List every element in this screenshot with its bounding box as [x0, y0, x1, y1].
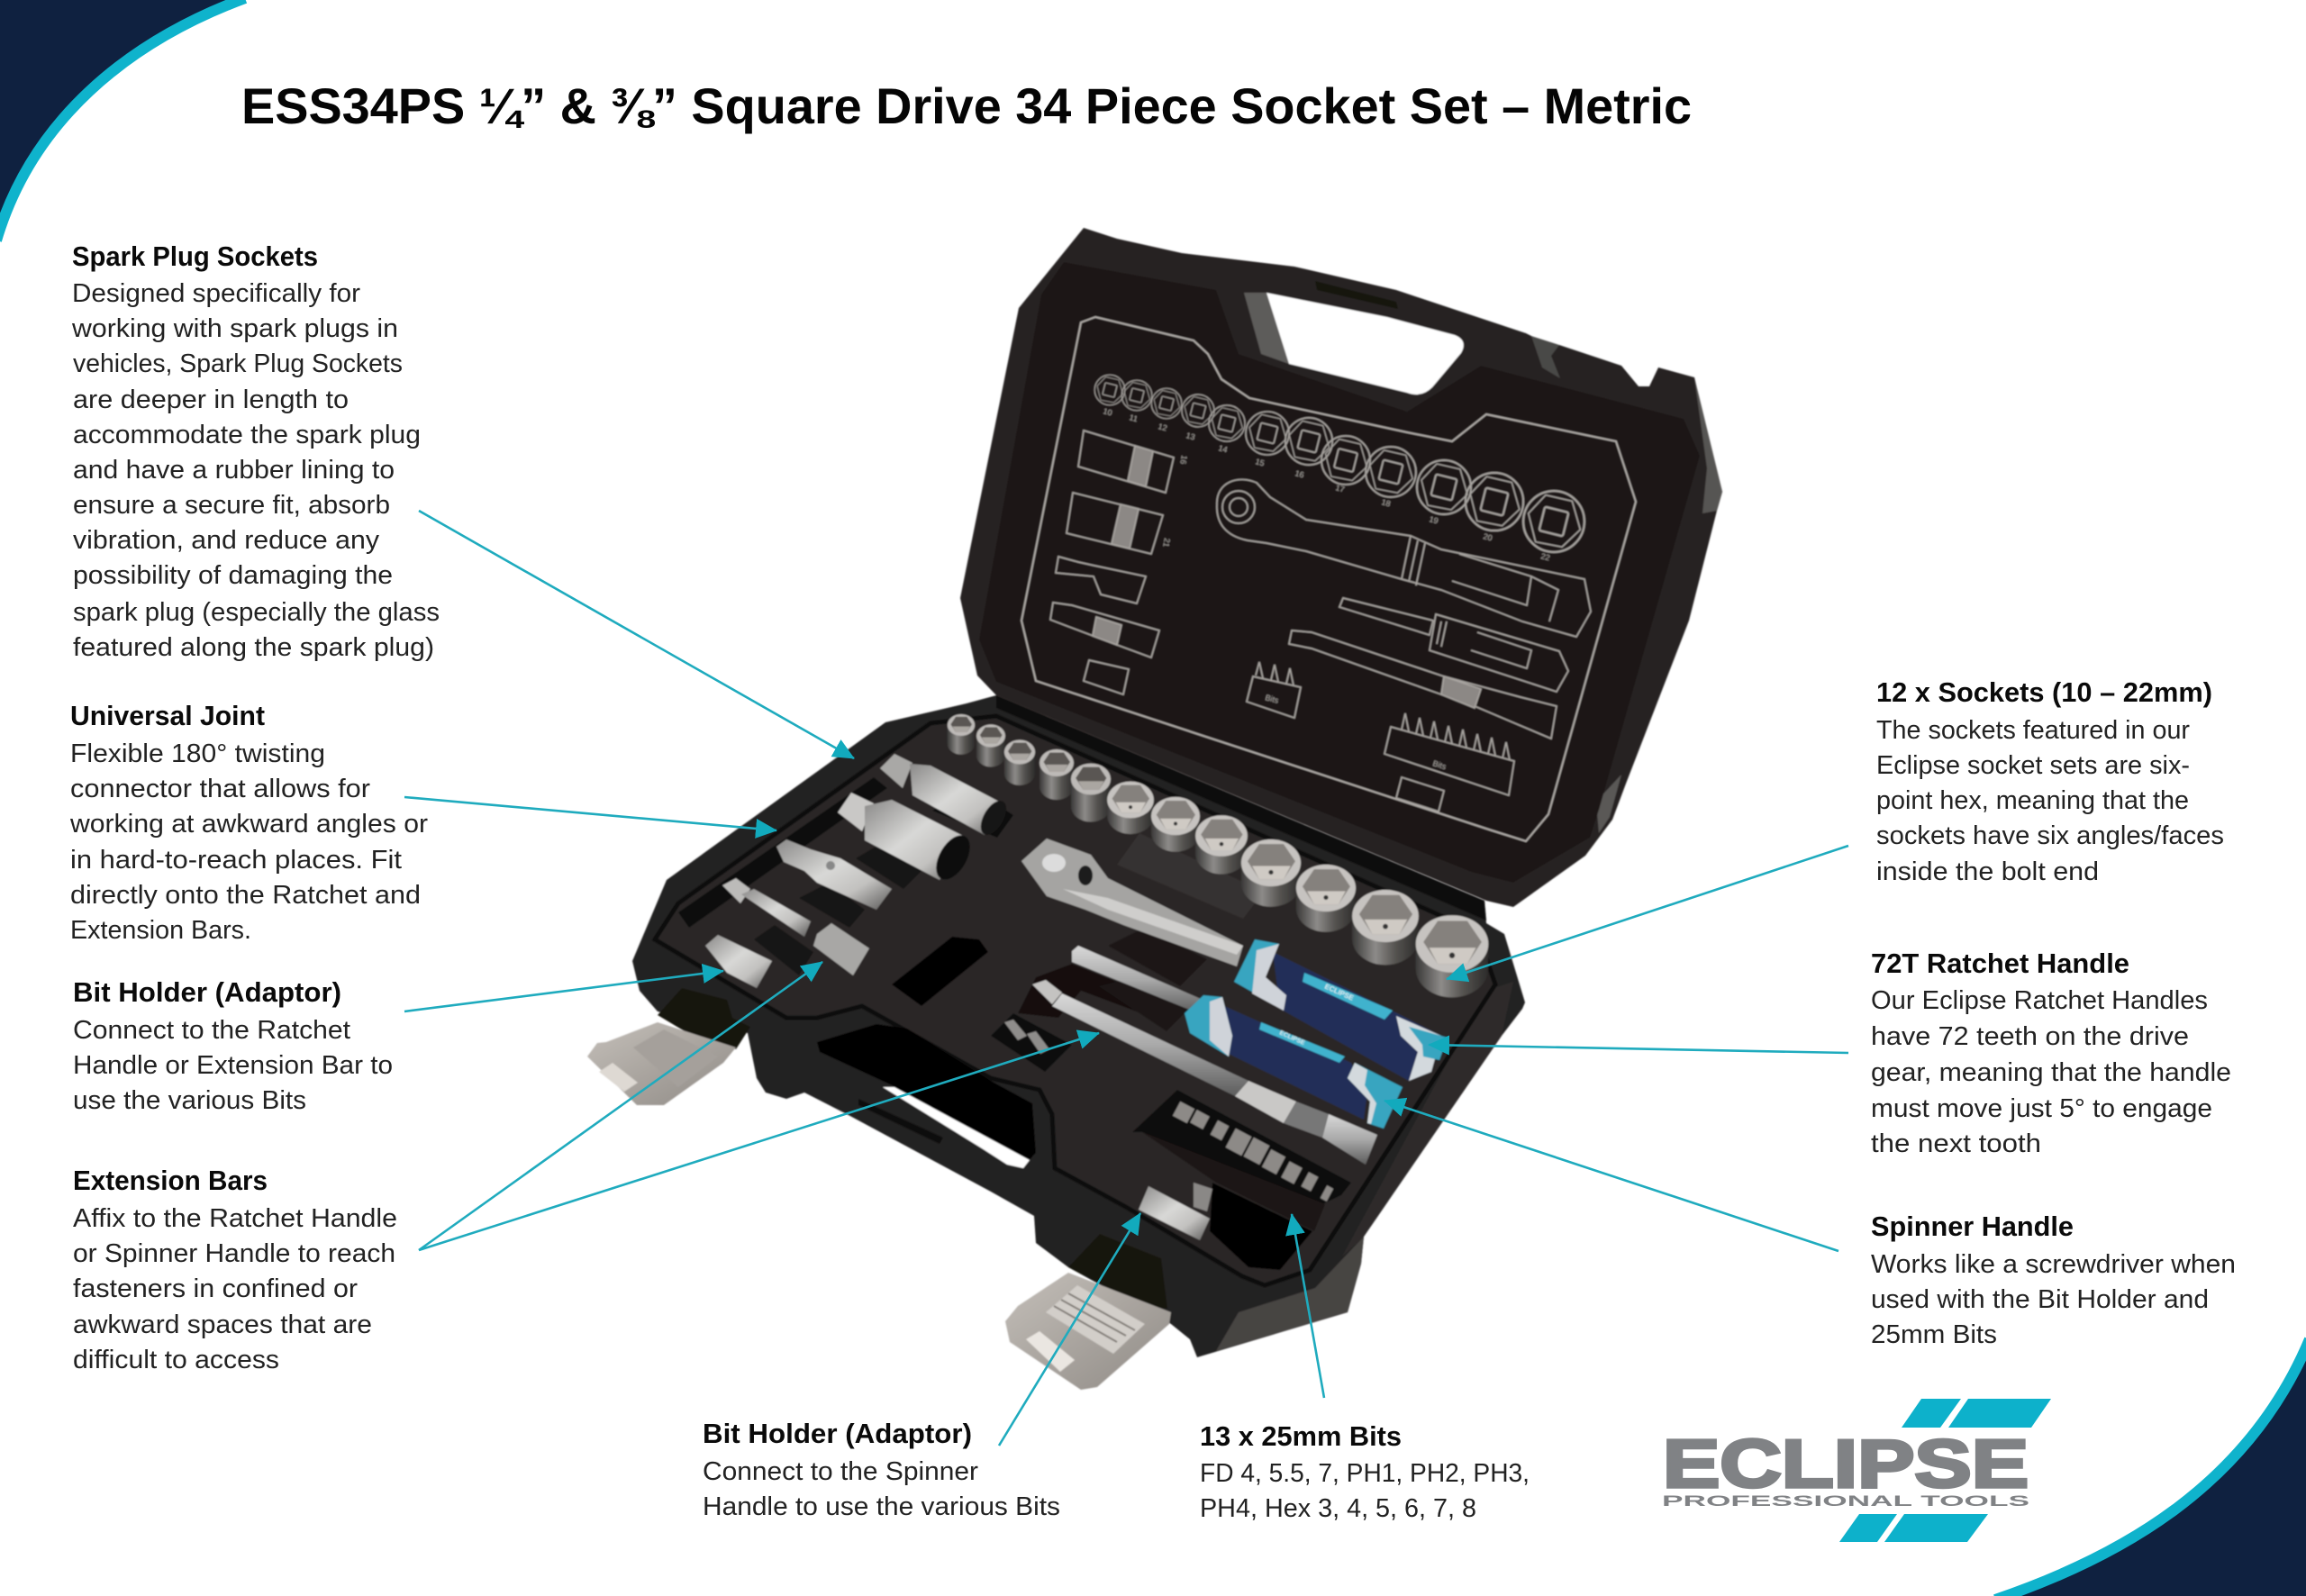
callout: spark plug sockets: Spark Plug Sockets — [72, 240, 318, 272]
photo: open socket set case — [587, 228, 1722, 1390]
callout: 25mm bits: FD 4, 5.5, 7, PH1, PH2, PH3, — [1200, 1459, 1530, 1488]
callout: spinner handle: Works like a screwdriver when — [1871, 1250, 2236, 1279]
callout: universal joint: directly onto the Ratchet and — [70, 881, 421, 910]
arrow: ratchet handle — [1429, 1045, 1848, 1053]
callout: sockets: sockets have six angles/faces — [1876, 821, 2224, 850]
ratchet handle — [1021, 839, 1448, 1081]
handle opening — [817, 1024, 1036, 1166]
logo: Eclipse Professional Tools — [1662, 1399, 2051, 1542]
callout: spark plug sockets: ensure a secure fit, absorb — [73, 491, 390, 520]
callout: bottom bit holder: Handle to use the various Bits — [703, 1492, 1060, 1521]
arrow: universal joint — [404, 797, 776, 830]
lid socket outlines: 20 — [1482, 531, 1493, 543]
callout: spark plug sockets: featured along the spark plug) — [73, 633, 434, 662]
bit holder — [705, 935, 772, 988]
callout: extension bars: awkward spaces that are — [73, 1310, 372, 1339]
callout: bottom bit holder — [703, 1418, 1060, 1521]
universal joint — [776, 839, 892, 910]
second bit holder — [1139, 1183, 1212, 1240]
callout: universal joint: working at awkward angles or — [69, 810, 428, 839]
callout: spark plug sockets: possibility of damaging the — [73, 561, 393, 590]
case lid: Bits — [1264, 693, 1280, 705]
lid socket outlines: 18 — [1380, 497, 1392, 509]
callout: bottom bit holder: Bit Holder (Adaptor) — [703, 1418, 972, 1449]
background corner: bottom right — [1995, 1338, 2306, 1596]
callout: sockets: 12 x Sockets (10 – 22mm) — [1876, 676, 2212, 708]
latches — [587, 988, 1171, 1390]
callout: extension bars: or Spinner Handle to reach — [73, 1239, 395, 1268]
arrow: spark plug sockets — [419, 511, 854, 758]
callout: ratchet handle: the next tooth — [1871, 1129, 2041, 1158]
callout: ratchet handle: 72T Ratchet Handle — [1871, 948, 2129, 979]
short extension bar — [722, 878, 869, 975]
callout: bit holder adaptor: use the various Bits — [73, 1086, 306, 1115]
spinner handle: ECLIPSE — [1278, 1029, 1306, 1047]
callout arrows — [404, 511, 1848, 1446]
tray recesses — [892, 937, 988, 1006]
lid foam outline — [1021, 317, 1636, 841]
callout: spark plug sockets: spark plug (especially the glass — [73, 598, 440, 627]
lower bit rack pocket — [1132, 1090, 1351, 1204]
case lid: 16 — [1178, 455, 1189, 465]
callout: universal joint: in hard-to-reach places. Fit — [70, 846, 402, 875]
callout: bit holder adaptor: Bit Holder (Adaptor) — [73, 976, 341, 1008]
callout: extension bars: Extension Bars — [73, 1165, 268, 1196]
tray floor — [655, 716, 1495, 1285]
lid socket outlines: 13 — [1185, 431, 1196, 442]
callout: ratchet handle: Our Eclipse Ratchet Handles — [1871, 986, 2208, 1015]
logo: Eclipse Professional Tools: PROFESSIONAL TOOLS — [1662, 1492, 2029, 1510]
spark plug sockets — [838, 754, 1012, 885]
title: ESS34PS ¼” & ⅜” Square Drive 34 Piece Socket Set – Metric — [241, 77, 1692, 134]
lid socket outlines: 22 — [1539, 551, 1551, 563]
callout: bit holder adaptor: Handle or Extension Bar to — [73, 1051, 393, 1080]
latch: lower hinge — [1068, 1234, 1167, 1309]
callout: sockets: inside the bolt end — [1876, 857, 2099, 886]
arrow: extension bars long — [419, 1033, 1099, 1250]
callout: extension bars: fasteners in confined or — [73, 1274, 358, 1303]
callout: bit holder adaptor — [73, 976, 393, 1115]
arrow: bit holder — [404, 971, 723, 1011]
lid socket outlines: 14 — [1217, 443, 1229, 455]
callout: universal joint: Universal Joint — [70, 700, 265, 731]
callout: universal joint: connector that allows for — [70, 775, 370, 803]
tray channel — [678, 777, 887, 928]
callout: spark plug sockets: are deeper in length to — [73, 385, 349, 414]
hinge strip — [996, 695, 1486, 920]
bit rack cover — [1142, 1132, 1325, 1231]
arrow: extension bars short — [419, 962, 822, 1250]
case base — [632, 695, 1525, 1357]
callout: spinner handle: Spinner Handle — [1871, 1211, 2074, 1242]
callout: extension bars — [73, 1165, 397, 1374]
arrow: bits — [1292, 1214, 1324, 1398]
spinner handle — [1072, 946, 1403, 1129]
case lid: Bits — [1431, 758, 1448, 771]
lid tool outlines — [1050, 431, 1591, 812]
callout: sockets: point hex, meaning that the — [1876, 786, 2189, 815]
lid socket outlines: 11 — [1128, 413, 1139, 423]
callout: universal joint: Extension Bars. — [70, 916, 251, 945]
callout: spark plug sockets: working with spark plugs in — [71, 314, 398, 343]
lid socket outlines: 10 — [1102, 406, 1113, 418]
callout: spinner handle: used with the Bit Holder and — [1871, 1285, 2209, 1314]
callout: sockets — [1876, 676, 2224, 886]
callout: sockets: The sockets featured in our — [1876, 716, 2190, 745]
callout: spark plug sockets: vehicles, Spark Plug Sockets — [73, 349, 403, 378]
ratchet handle: ECLIPSE — [1323, 983, 1356, 1002]
callout: 25mm bits — [1200, 1420, 1530, 1523]
latch: left hinge — [658, 988, 750, 1049]
lid socket outlines: 17 — [1334, 483, 1346, 494]
upper bit rack — [991, 1013, 1072, 1072]
callout: extension bars: difficult to access — [73, 1346, 279, 1374]
arrow: sockets — [1447, 846, 1848, 979]
callout: universal joint: Flexible 180° twisting — [70, 739, 325, 768]
lid socket outlines: 16 — [1294, 468, 1305, 480]
lid socket outlines — [1094, 375, 1584, 563]
callout: spark plug sockets: Designed specifically for — [72, 279, 360, 308]
callout: sockets: Eclipse socket sets are six- — [1876, 751, 2190, 780]
callout: spinner handle — [1871, 1211, 2236, 1349]
lid socket outlines: 19 — [1428, 514, 1439, 526]
callout: spark plug sockets: accommodate the spark plug — [73, 421, 421, 449]
callout: 25mm bits: PH4, Hex 3, 4, 5, 6, 7, 8 — [1200, 1494, 1476, 1523]
arrow: spinner handle — [1385, 1101, 1838, 1251]
callout: 25mm bits: 13 x 25mm Bits — [1200, 1420, 1402, 1452]
lid handle opening — [1244, 293, 1289, 364]
callout: ratchet handle: gear, meaning that the handle — [1871, 1058, 2231, 1087]
arrow: bottom bit holder — [999, 1213, 1140, 1446]
callout: bottom bit holder: Connect to the Spinner — [703, 1457, 978, 1486]
callout: universal joint — [69, 700, 428, 945]
callout: spark plug sockets — [71, 240, 440, 662]
long extension bar — [1032, 980, 1377, 1165]
logo: Eclipse Professional Tools: ECLIPSE — [1663, 1426, 2029, 1501]
case lid — [960, 228, 1722, 907]
lid socket outlines: 15 — [1254, 457, 1266, 468]
callout: extension bars: Affix to the Ratchet Handle — [73, 1204, 397, 1233]
twelve sockets — [948, 714, 1488, 997]
lower bit rack — [1142, 1102, 1333, 1231]
case lid: 21 — [1161, 538, 1172, 548]
callout: spinner handle: 25mm Bits — [1871, 1320, 1997, 1349]
callout: bit holder adaptor: Connect to the Ratchet — [73, 1016, 350, 1045]
callout: ratchet handle — [1871, 948, 2231, 1158]
callout: ratchet handle: have 72 teeth on the drive — [1871, 1022, 2189, 1051]
callout: spark plug sockets: and have a rubber lining to — [73, 456, 395, 485]
background corner: top left — [0, 0, 245, 240]
callout: ratchet handle: must move just 5° to engage — [1871, 1094, 2212, 1123]
callout: spark plug sockets: vibration, and reduce any — [73, 526, 380, 555]
lid socket outlines: 12 — [1157, 422, 1168, 433]
